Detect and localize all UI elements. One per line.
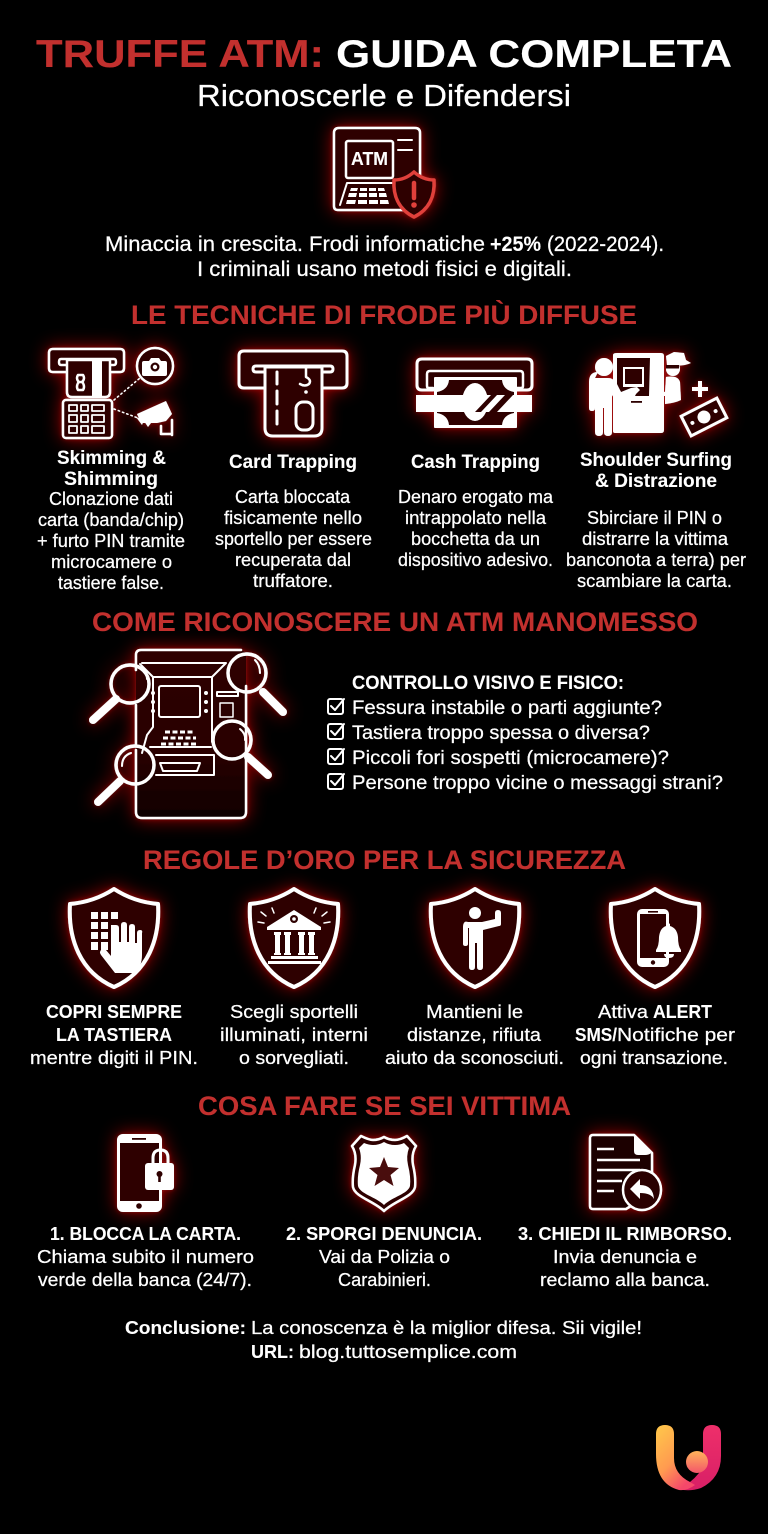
heading: golden rules: REGOLE D’ORO PER LA SICUREZZA [143,845,626,875]
text: skimming: carta (banda/chip) [38,509,184,530]
text: cash trapping [398,486,554,570]
title: shoulder surfing: & Distrazione [595,471,717,492]
text: cash trapping: bocchetta da un [411,528,540,549]
title: card trapping: Card Trapping [229,452,357,473]
text: alerts: ogni transazione. [580,1047,728,1068]
text: report [286,1223,482,1290]
subtitle: Riconoscerle e Difendersi [197,78,571,113]
text: refund: reclamo alla banca. [540,1269,710,1290]
text: skimming: microcamere o [51,551,172,572]
text: refund [518,1223,732,1290]
icon: document with return arrow [590,1135,661,1210]
panel: choose ATMs [220,889,368,1068]
text: cover keypad: LA TASTIERA [56,1024,172,1045]
title: GUIDA COMPLETA [336,33,732,76]
text: keep distance: aiuto da sconosciuti. [385,1047,564,1068]
text: alerts: SMS/ [575,1024,617,1045]
intro text [105,233,664,281]
panel: cover keypad [30,889,198,1068]
text: shoulder surfing [566,507,746,591]
text: block card: 1. BLOCCA LA CARTA. [50,1223,241,1244]
text: shoulder surfing: distrarre la vittima [582,528,729,549]
checklist item 4: Persone troppo vicine o messaggi strani? [352,773,723,794]
text: report: Carabinieri. [338,1269,431,1290]
text: card trapping: sportello per essere [215,528,372,549]
panel: block card [37,1134,254,1290]
text: keep distance: distanze, rifiuta [407,1024,542,1045]
text: skimming: Clonazione dati [49,488,173,509]
icon: phone with padlock [117,1134,174,1212]
text: choose ATMs: o sorvegliati. [239,1047,349,1068]
checklist item 2: Tastiera troppo spessa o diversa? [352,723,650,744]
text: cover keypad: COPRI SEMPRE [46,1001,182,1022]
icon: ATM with warning shield [334,128,434,217]
checklist item 1: Fessura instabile o parti aggiunte? [352,698,662,719]
text: card trapping: fisicamente nello [224,507,362,528]
panel: alerts [575,889,735,1068]
conclusion [125,1317,642,1362]
conclusion: URL: [251,1341,294,1362]
text: alerts: ALERT [653,1001,713,1022]
intro text: +25% [490,233,541,256]
text: report: 2. SPORGI DENUNCIA. [286,1223,482,1244]
intro text: (2022-2024). [547,233,664,256]
panel: skimming [37,348,185,593]
intro text: I criminali usano metodi fisici e digitali. [197,258,572,281]
title: skimming [57,448,166,490]
title: TRUFFE ATM: [36,33,324,76]
panel: visual check [328,673,723,794]
title [36,33,732,76]
icon: shield with bank [250,889,338,987]
heading: techniques: LE TECNICHE DI FRODE PIÙ DIFFUSE [131,299,637,330]
text: card trapping: recuperata dal [235,549,351,570]
text: cash trapping: intrappolato nella [405,507,547,528]
text: block card: Chiama subito il numero [37,1246,254,1267]
text: alerts: Notifiche per [617,1024,735,1045]
panel: report [286,1136,482,1290]
heading: check: CONTROLLO VISIVO E FISICO: [352,673,624,694]
intro text: Minaccia in crescita. Frodi informatiche [105,233,485,256]
icon: police badge [352,1136,416,1211]
text: alerts [575,1001,735,1068]
icon: shoulder surfing [589,352,727,436]
text: refund: 3. CHIEDI IL RIMBORSO. [518,1223,732,1244]
text: card trapping: Carta bloccata [235,486,351,507]
icon: ATM under magnifiers [93,650,283,818]
checklist item 3: Piccoli fori sospetti (microcamere)? [352,748,669,769]
heading: recognise: COME RICONOSCERE UN ATM MANOMESSO [92,607,698,637]
title: shoulder surfing [580,450,732,492]
panel: shoulder surfing [566,352,746,591]
icon: cash trapping [416,359,532,428]
panel: card trapping [215,351,372,591]
title: skimming: Skimming & [57,448,166,469]
text: choose ATMs: illuminati, interni [220,1024,368,1045]
text: shoulder surfing: scambiare la carta. [577,570,732,591]
text: cash trapping: Denaro erogato ma [398,486,554,507]
text: card trapping: truffatore. [253,570,333,591]
icon: shield with phone and bell [611,889,699,987]
icon: skimming [49,348,173,438]
logo [656,1425,721,1490]
text: card trapping [215,486,372,591]
conclusion: La conoscenza è la miglior difesa. Sii vigile! [251,1317,642,1338]
panel: refund [518,1135,732,1290]
text: cover keypad [30,1001,198,1068]
text: skimming: + furto PIN tramite [37,530,185,551]
text: block card [37,1223,254,1290]
icon: shield with keypad and hand [70,889,158,987]
panel: keep distance [385,889,564,1068]
text: shoulder surfing: banconota a terra) per [566,549,746,570]
text: alerts: Attiva [598,1001,649,1022]
text: block card: verde della banca (24/7). [38,1269,252,1290]
text: refund: Invia denuncia e [553,1246,697,1267]
text: keep distance [385,1001,564,1068]
text: choose ATMs: Scegli sportelli [230,1001,358,1022]
title: skimming: Shimming [64,469,158,490]
text: choose ATMs [220,1001,368,1068]
panel: cash trapping [398,359,554,570]
icon: shield with person stop [431,889,519,987]
icon: ATM with warning shield: ATM [351,149,388,169]
text: cash trapping: dispositivo adesivo. [398,549,553,570]
text: shoulder surfing: Sbirciare il PIN o [587,507,722,528]
conclusion: blog.tuttosemplice.com [299,1341,517,1362]
heading: if victim: COSA FARE SE SEI VITTIMA [198,1091,571,1121]
text: cover keypad: mentre digiti il PIN. [30,1047,198,1068]
title: shoulder surfing: Shoulder Surfing [580,450,732,471]
title: cash trapping: Cash Trapping [411,452,540,473]
text: skimming [37,488,185,593]
icon: card trapping [239,351,347,436]
text: skimming: tastiere false. [58,572,164,593]
text: keep distance: Mantieni le [426,1001,523,1022]
conclusion: Conclusione: [125,1317,246,1338]
text: report: Vai da Polizia o [319,1246,450,1267]
